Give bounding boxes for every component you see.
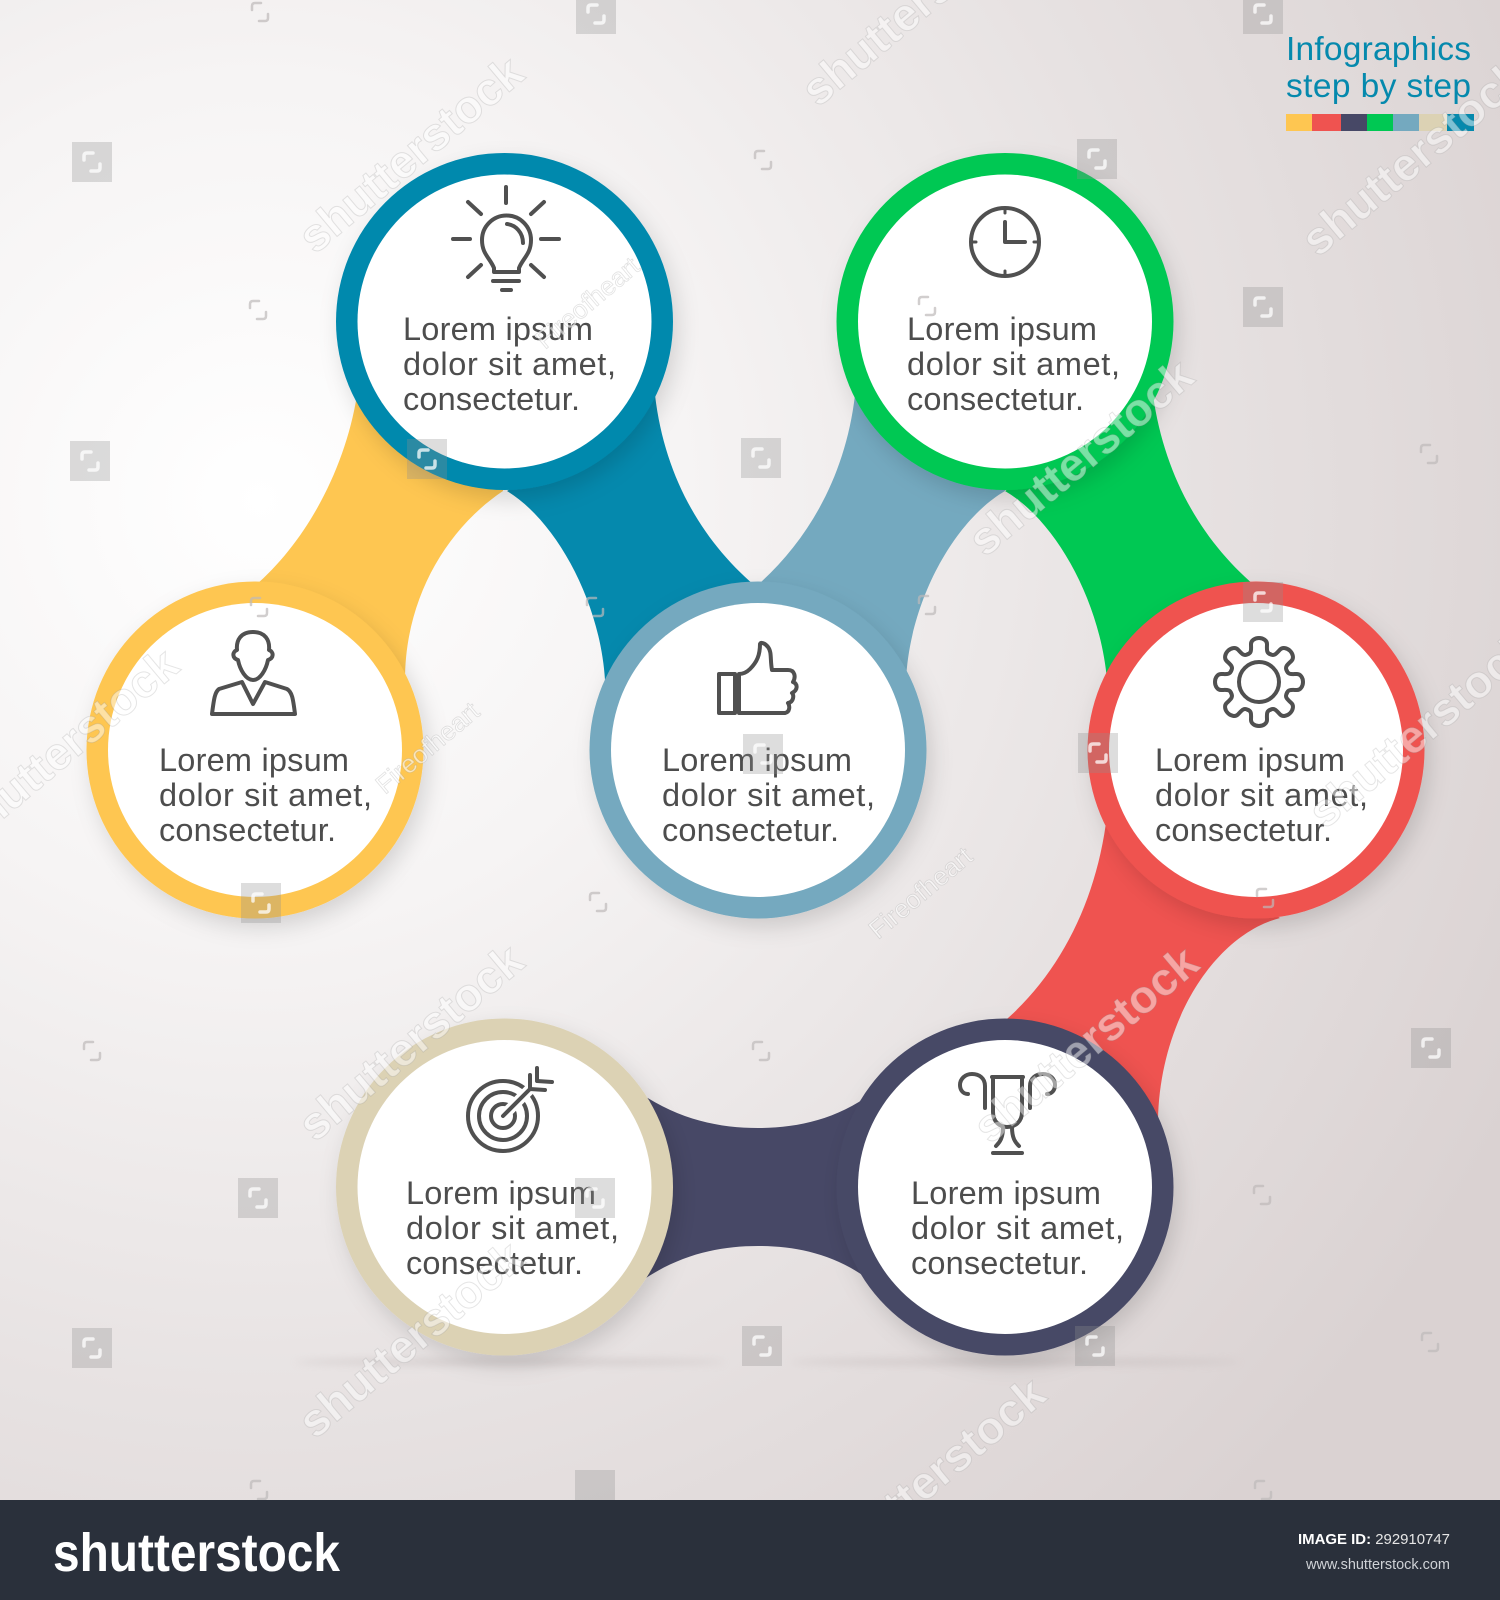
step: green clock (836, 153, 1174, 490)
text: dolor sit amet, (403, 346, 616, 382)
connector: red (1000, 815, 1280, 1120)
footer logo: shutterstock (53, 1523, 341, 1583)
white disc (358, 174, 652, 468)
text: Lorem ipsum (662, 742, 852, 778)
step: blue bulb (336, 153, 673, 490)
white disc (611, 603, 905, 897)
text: consectetur. (406, 1245, 583, 1281)
footer url: www.shutterstock.com (1305, 1556, 1450, 1573)
text (406, 1175, 619, 1281)
text: consectetur. (907, 381, 1084, 417)
icon: light bulb (453, 187, 559, 290)
connector: yellow (250, 395, 503, 680)
ring (836, 153, 1174, 490)
ring (836, 1018, 1174, 1356)
ring (1088, 582, 1424, 918)
step: beige target (336, 1018, 673, 1356)
text: consectetur. (403, 381, 580, 417)
footer bar (0, 1500, 1500, 1600)
text (159, 742, 372, 848)
text: dolor sit amet, (406, 1210, 619, 1246)
watermark text: shutterstock (958, 348, 1203, 566)
text: dolor sit amet, (662, 777, 875, 813)
watermark text: Fireofheart (530, 250, 646, 355)
white disc (858, 174, 1152, 468)
text (907, 311, 1120, 417)
step: navy trophy (836, 1018, 1174, 1356)
ring (86, 582, 424, 918)
icon: thumbs up (719, 643, 797, 713)
watermark text: Fireofheart (863, 840, 979, 945)
icon: target (468, 1068, 552, 1151)
text (662, 742, 875, 848)
text: Lorem ipsum (159, 742, 349, 778)
connector: navy (640, 1093, 872, 1282)
text: dolor sit amet, (907, 346, 1120, 382)
icon: clock (971, 208, 1039, 276)
watermark text: Fireofheart (370, 695, 486, 800)
legend colour bar (1286, 114, 1474, 131)
text: consectetur. (159, 812, 336, 848)
footer image id: IMAGE ID: 292910747 (1298, 1531, 1450, 1548)
white disc (358, 1040, 652, 1334)
text (911, 1175, 1124, 1281)
watermark text: shutterstock (288, 1230, 533, 1448)
white disc (108, 603, 402, 897)
text: Lorem ipsum (403, 311, 593, 347)
text: Lorem ipsum (1155, 742, 1345, 778)
watermark tile marks (82, 5, 1439, 1357)
text: dolor sit amet, (1155, 777, 1368, 813)
text: dolor sit amet, (159, 777, 372, 813)
ring (590, 582, 926, 918)
legend title: Infographics (1286, 31, 1471, 68)
white disc (858, 1040, 1152, 1334)
step: red gear (1088, 582, 1424, 918)
text: dolor sit amet, (911, 1210, 1124, 1246)
text: consectetur. (662, 812, 839, 848)
text: Lorem ipsum (907, 311, 1097, 347)
ring (336, 153, 673, 490)
text (1155, 742, 1368, 848)
watermark text: shutterstock (810, 1366, 1055, 1584)
white disc (1109, 603, 1403, 897)
connector: light blue (752, 395, 1005, 680)
ring (336, 1018, 673, 1356)
icon: gear (1215, 638, 1303, 726)
text: consectetur. (911, 1245, 1088, 1281)
floor shadow (295, 1358, 1240, 1366)
text (403, 311, 616, 417)
connector: blue (507, 395, 760, 680)
connectors (250, 395, 1280, 1282)
legend title: step by step (1286, 68, 1471, 105)
watermark text: shutterstock (288, 933, 533, 1151)
text: Lorem ipsum (911, 1175, 1101, 1211)
connector: green (1005, 395, 1260, 680)
icon: trophy (960, 1074, 1055, 1153)
watermark text: shutterstock (288, 45, 533, 263)
step: yellow person (86, 582, 424, 918)
legend title (1286, 31, 1471, 105)
watermark text: shutterstock (963, 935, 1208, 1153)
icon: person (212, 632, 295, 714)
text: consectetur. (1155, 812, 1332, 848)
step: light blue thumb (590, 582, 926, 918)
text: Lorem ipsum (406, 1175, 596, 1211)
